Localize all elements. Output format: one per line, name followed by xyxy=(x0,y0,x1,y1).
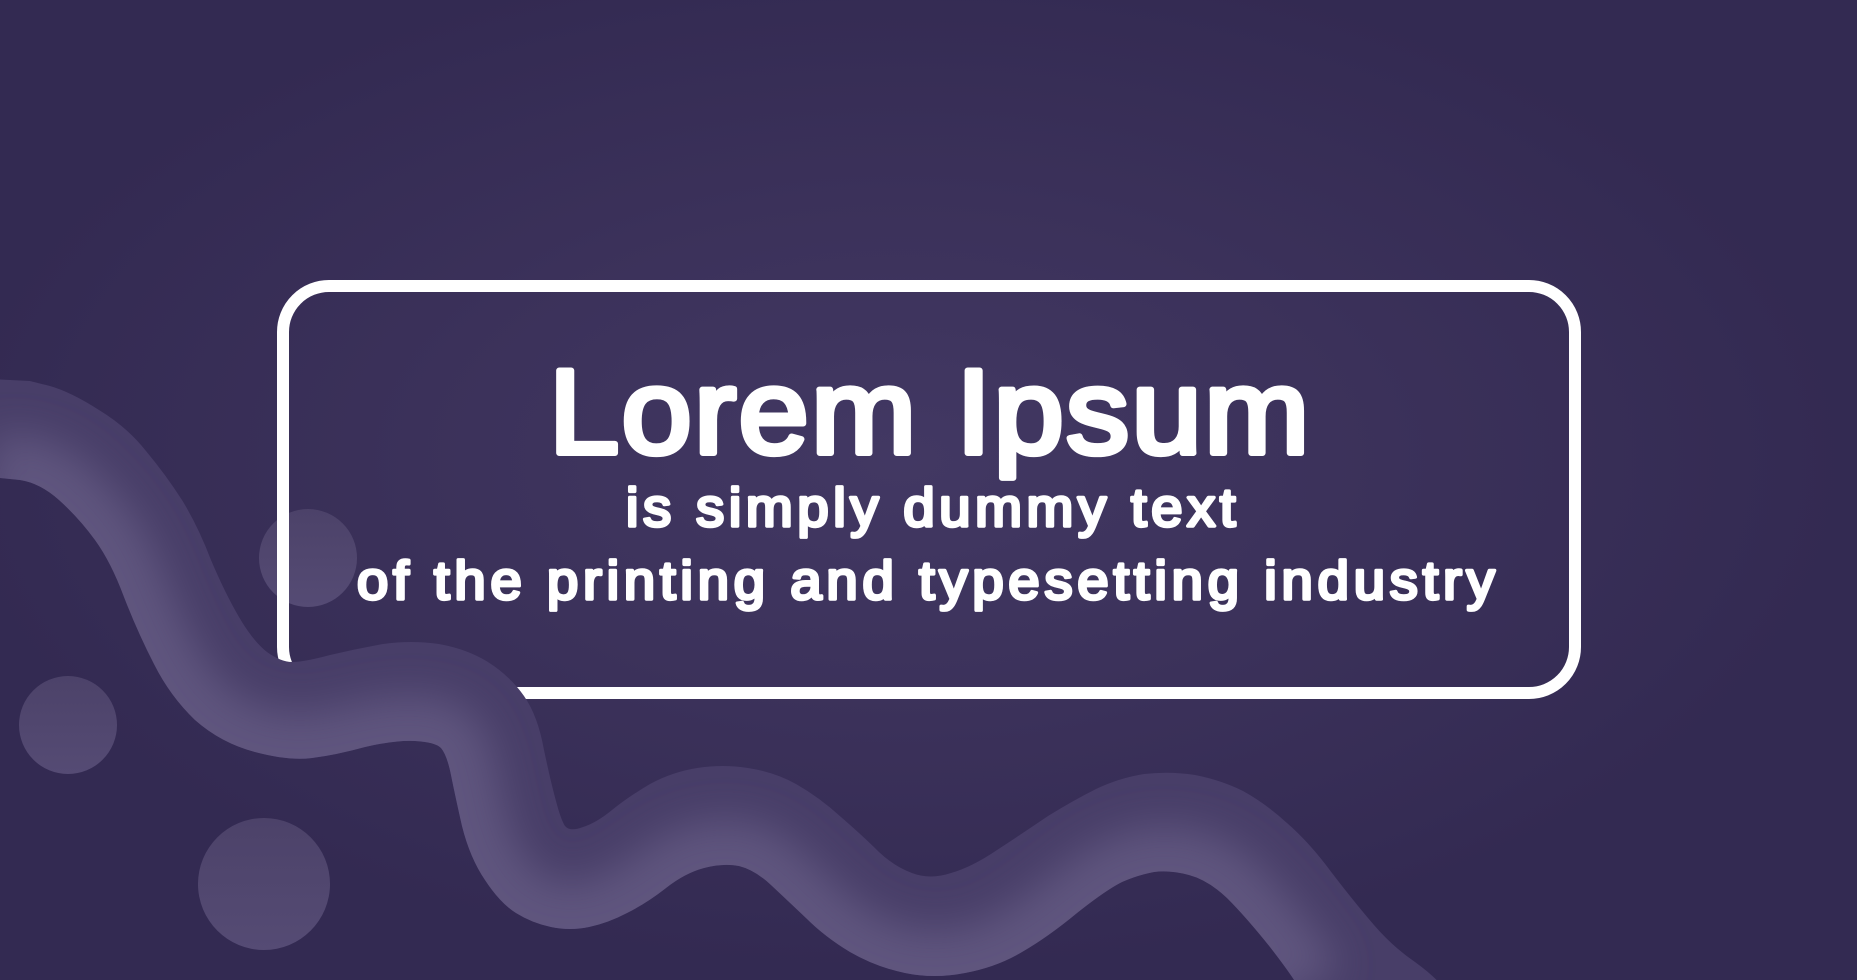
circle: left xyxy=(19,676,117,774)
wavy ribbon xyxy=(0,360,1470,980)
subtitle line 1: is simply dummy text xyxy=(626,478,1235,538)
infographic canvas xyxy=(0,199,1581,980)
title: Lorem Ipsum xyxy=(549,345,1309,479)
circle: bottom xyxy=(198,818,330,950)
subtitle line 2: of the printing and typesetting industry xyxy=(357,551,1495,611)
circle behind frame xyxy=(259,509,357,607)
rounded white frame xyxy=(283,286,1575,693)
